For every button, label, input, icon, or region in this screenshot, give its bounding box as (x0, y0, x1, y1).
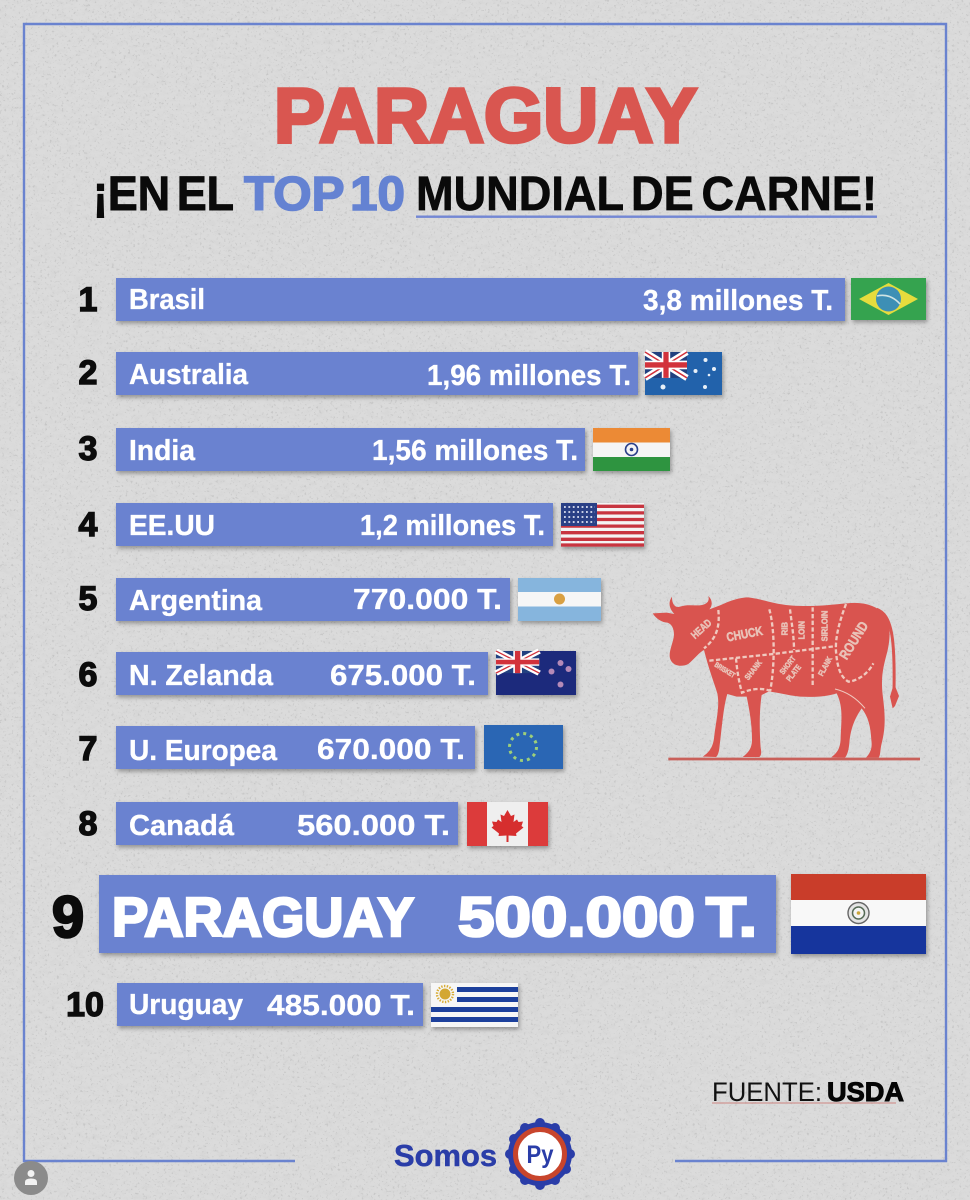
cut labels: LOIN (798, 621, 807, 639)
row 1: Brasil: Brasil (129, 284, 205, 316)
row 5: Argentina: Argentina (129, 585, 263, 617)
cow body (653, 596, 890, 758)
row 9: Paraguay highlighted: PARAGUAY (112, 886, 414, 948)
row 2: Australia: Australia (129, 359, 249, 391)
cut lines (704, 604, 873, 693)
row 8: Canadá: 8 (79, 805, 97, 843)
row 10: Uruguay (66, 983, 518, 1027)
row 6: N. Zelanda: N. Zelanda (129, 660, 274, 692)
cut labels: BRISKET (713, 660, 737, 680)
row 10: Uruguay: Uruguay (129, 989, 243, 1021)
row 9: Paraguay highlighted: 500.000 T. (458, 885, 757, 948)
row 7: U. Europea: 7 (79, 730, 97, 768)
cut labels: PLATE (784, 663, 803, 683)
row 4: EE.UU: 1,2 millones T. (360, 510, 545, 542)
row 3: India: 3 (79, 430, 97, 468)
cut labels: CHUCK (725, 624, 765, 645)
row 4: EE.UU (79, 503, 644, 546)
cut labels: HEAD (689, 617, 715, 642)
row 5: Argentina: 770.000 T. (353, 584, 502, 616)
row 8: Canadá: 560.000 T. (297, 810, 450, 842)
row 6: N. Zelanda: 6 (79, 656, 97, 694)
row 5: Argentina: 5 (79, 580, 97, 618)
cow tail (877, 609, 894, 692)
row 6: N. Zelanda (79, 651, 576, 695)
row 1: Brasil: 1 (79, 281, 97, 319)
subtitle: ¡EN EL (93, 168, 234, 221)
logo badge (505, 1118, 575, 1190)
logo badge: Py (526, 1141, 554, 1169)
illustration: cow with beef cuts (653, 596, 920, 759)
subtitle: MUNDIAL DE CARNE! (416, 168, 877, 221)
row 1: Brasil (79, 278, 926, 321)
ground line (668, 755, 920, 763)
row 4: EE.UU: EE.UU (129, 510, 215, 542)
row 8: Canadá: Canadá (129, 810, 235, 842)
row 2: Australia: 1,96 millones T. (427, 360, 631, 392)
row 7: U. Europea: 670.000 T. (317, 734, 465, 766)
row 8: Canadá (79, 802, 548, 846)
row 1: Brasil: 3,8 millones T. (643, 285, 833, 317)
row 5: Argentina (79, 578, 601, 621)
source note: FUENTE: (712, 1077, 822, 1107)
row 2: Australia (79, 352, 722, 395)
cut labels: SIRLOIN (820, 610, 829, 641)
row 9: Paraguay highlighted: 9 (52, 885, 84, 950)
row 7: U. Europea (79, 725, 563, 769)
cut labels: SHANK (743, 658, 764, 682)
cut labels: SHORT (778, 654, 798, 676)
cut labels (689, 610, 871, 683)
tail tuft (890, 683, 899, 708)
cut labels: FLANK (816, 655, 834, 678)
row 9: Paraguay highlighted (52, 874, 926, 954)
cut labels: ROUND (836, 618, 871, 662)
subtitle: TOP 10 (244, 168, 405, 221)
row 2: Australia: 2 (79, 354, 97, 392)
brand name: Somos (394, 1138, 497, 1173)
row 3: India (79, 428, 670, 471)
source note: USDA (827, 1077, 904, 1107)
row 6: N. Zelanda: 675.000 T. (330, 660, 476, 692)
profile avatar (14, 1161, 48, 1195)
row 10: Uruguay: 10 (66, 986, 104, 1024)
cut labels: RIB (780, 622, 789, 635)
row 3: India: 1,56 millones T. (372, 435, 578, 467)
row 3: India: India (129, 435, 196, 467)
source note (712, 1077, 904, 1107)
subtitle (93, 168, 877, 221)
row 10: Uruguay: 485.000 T. (267, 990, 415, 1022)
row 4: EE.UU: 4 (79, 506, 98, 544)
title: PARAGUAY (274, 73, 697, 159)
belly highlight (835, 689, 865, 708)
row 7: U. Europea: U. Europea (129, 735, 278, 767)
